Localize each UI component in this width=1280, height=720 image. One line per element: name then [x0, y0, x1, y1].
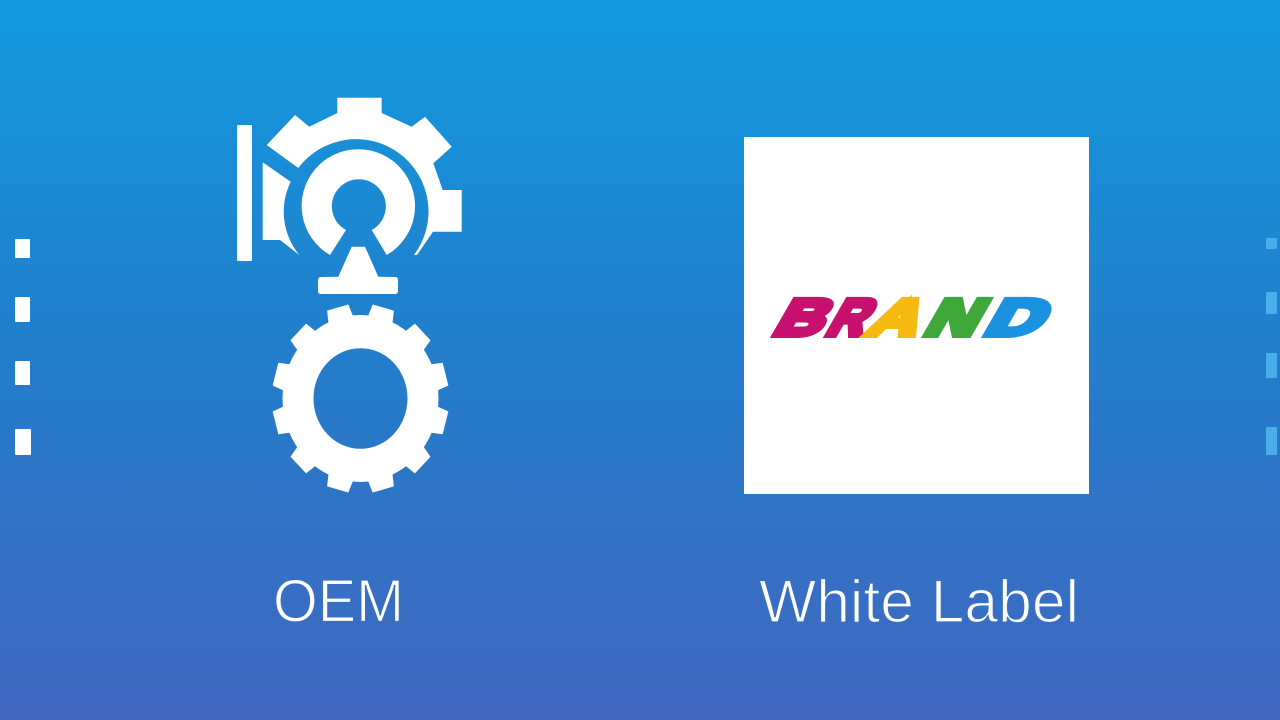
icon: pointer base [318, 247, 398, 294]
icon: upper gear outer [267, 98, 462, 255]
brand logo: N [916, 289, 1000, 346]
brand logo: B [764, 289, 845, 346]
icon: inner open ring [302, 149, 415, 255]
icon: lower gear [272, 304, 449, 493]
right edge dashes [1266, 238, 1277, 455]
brand logo: D [976, 289, 1064, 346]
brand logo [764, 289, 1064, 346]
icon: vertical bar [237, 125, 252, 261]
label: OEM: OEM [273, 568, 404, 634]
panel: white label card [744, 137, 1089, 494]
brand logo: A [858, 289, 940, 346]
icon: OEM gears [237, 98, 462, 493]
icon: upper gear left segment [263, 162, 299, 255]
left edge dashes [15, 239, 31, 455]
label: White Label: White Label [759, 568, 1079, 635]
brand logo: R [818, 289, 888, 346]
